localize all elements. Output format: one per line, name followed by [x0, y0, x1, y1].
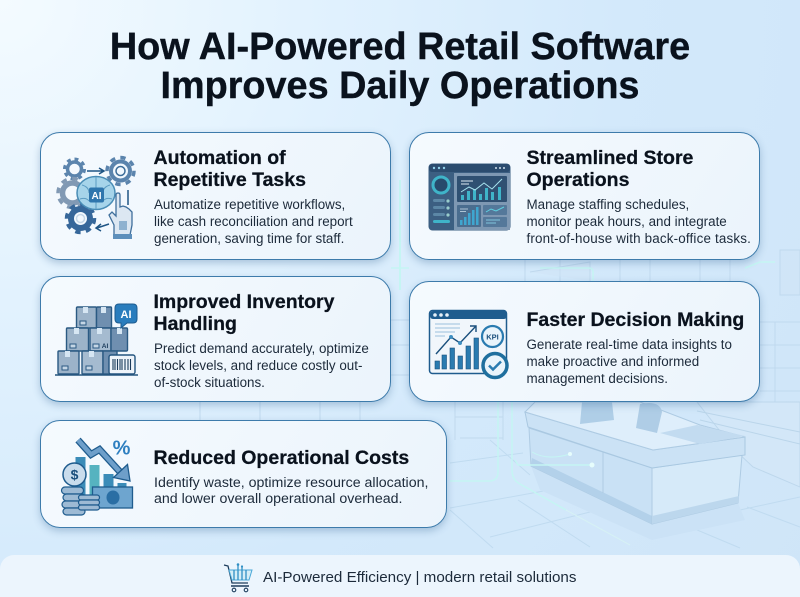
description: and lower overall operational overhead.: [154, 491, 402, 507]
icon: stacked boxes with AI bubble: AI: [120, 309, 132, 321]
description: [526, 337, 732, 386]
panel: reduced operational costs: [40, 420, 447, 528]
icon: gears with AI brain and robot hand: [56, 156, 136, 239]
description: Manage staffing schedules,: [526, 197, 689, 212]
footer text: AI-Powered Efficiency | modern retail solutions: [263, 568, 576, 586]
icon: stacked boxes with AI bubble: AI: [102, 343, 108, 350]
panel: automation of repetitive tasks: [40, 132, 391, 260]
panel: streamlined store operations: [409, 132, 760, 260]
floor tile lines: [450, 440, 800, 548]
description: like cash reconciliation and report: [154, 214, 353, 229]
icon: falling costs chart with coins: [60, 438, 134, 516]
heading: Automation of: [154, 147, 286, 169]
second counter: [697, 402, 800, 487]
description: generation, saving time for staff.: [154, 231, 344, 246]
heading: Reduced Operational Costs: [154, 447, 409, 469]
description: [154, 341, 369, 390]
icon: stacked boxes with AI bubble: [55, 304, 138, 376]
heading: Streamlined Store: [526, 147, 693, 169]
icon: KPI chart window: KPI: [486, 332, 499, 342]
counter right face: [652, 455, 742, 524]
heading: Handling: [154, 313, 237, 335]
icon: falling costs chart with coins: %: [113, 438, 131, 460]
title: How AI-Powered Retail Software: [110, 26, 690, 68]
description: Identify waste, optimize resource allocation,: [154, 475, 428, 491]
glowing circuit lines: [391, 180, 775, 510]
monitor and chair: [580, 402, 614, 424]
description: front-of-house with back-office tasks.: [526, 231, 751, 246]
shelves: [200, 250, 800, 440]
panel: faster decision making: [409, 281, 760, 402]
icon: shopping cart with circuit: [224, 563, 253, 592]
description: [154, 197, 353, 246]
description: make proactive and informed: [526, 354, 699, 369]
title: [110, 26, 690, 107]
icon: dashboard: [428, 164, 510, 230]
counter base and shadow: [531, 466, 745, 540]
icon: gears with AI brain and robot hand: AI: [92, 191, 102, 202]
description: stock levels, and reduce costly out-: [154, 358, 362, 373]
heading: [526, 147, 693, 191]
description: of-stock situations.: [154, 375, 265, 390]
panel: improved inventory handling: [40, 276, 391, 402]
heading: Repetitive Tasks: [154, 169, 306, 191]
description: Automatize repetitive workflows,: [154, 197, 345, 212]
counter left face: [529, 428, 652, 524]
heading: [154, 147, 306, 191]
heading: Faster Decision Making: [526, 309, 744, 331]
description: Generate real-time data insights to: [526, 337, 732, 352]
heading: [154, 291, 334, 335]
description: [526, 197, 751, 246]
heading: Improved Inventory: [154, 291, 334, 313]
footer bar: [0, 555, 800, 597]
icon: falling costs chart with coins: $: [71, 466, 79, 482]
description: management decisions.: [526, 371, 668, 386]
heading: Operations: [526, 169, 629, 191]
title: Improves Daily Operations: [161, 65, 639, 107]
icon: KPI chart window: [428, 310, 509, 380]
counter top and rim: [525, 412, 745, 468]
description: Predict demand accurately, optimize: [154, 341, 369, 356]
description: monitor peak hours, and integrate: [526, 214, 727, 229]
description: [154, 475, 428, 507]
